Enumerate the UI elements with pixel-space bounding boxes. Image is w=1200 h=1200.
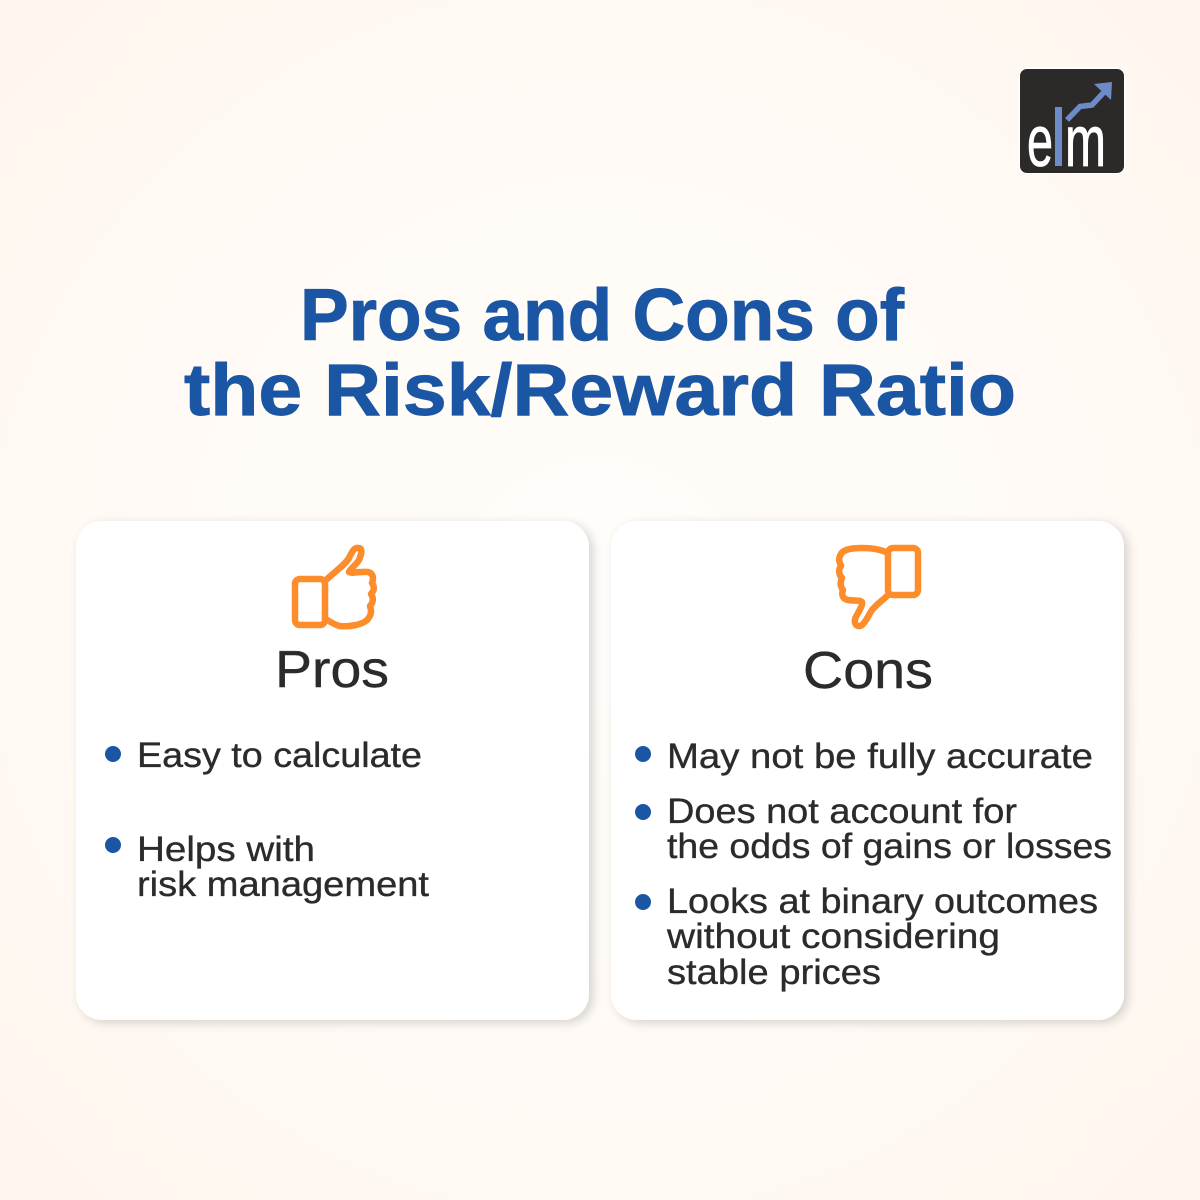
icon: thumbs down — [839, 548, 918, 626]
list: pros: risk management — [137, 865, 429, 904]
heading: Cons: Cons — [803, 642, 933, 700]
title: Pros and Cons of — [300, 275, 905, 356]
list: pros: Helps with — [137, 830, 315, 869]
list: pros: Easy to calculate — [137, 736, 422, 775]
panel: cons — [611, 521, 1124, 1020]
logo: elm: m — [1065, 102, 1106, 182]
list: cons: Looks at binary outcomes — [667, 882, 1098, 921]
list: cons — [635, 737, 1112, 992]
logo: elm — [1018, 67, 1126, 182]
logo: elm: e — [1027, 102, 1053, 182]
panel: pros — [76, 521, 589, 1020]
list: cons: the odds of gains or losses — [667, 827, 1112, 866]
icon: thumbs up — [295, 548, 374, 626]
title: the Risk/Reward Ratio — [184, 350, 1016, 431]
heading: Pros: Pros — [275, 641, 389, 699]
list: cons: stable prices — [667, 953, 881, 992]
title — [184, 275, 1016, 431]
list: pros — [105, 736, 429, 904]
list: cons: Does not account for — [667, 792, 1017, 831]
list: cons: May not be fully accurate — [667, 737, 1093, 776]
list: cons: without considering — [666, 917, 1000, 956]
